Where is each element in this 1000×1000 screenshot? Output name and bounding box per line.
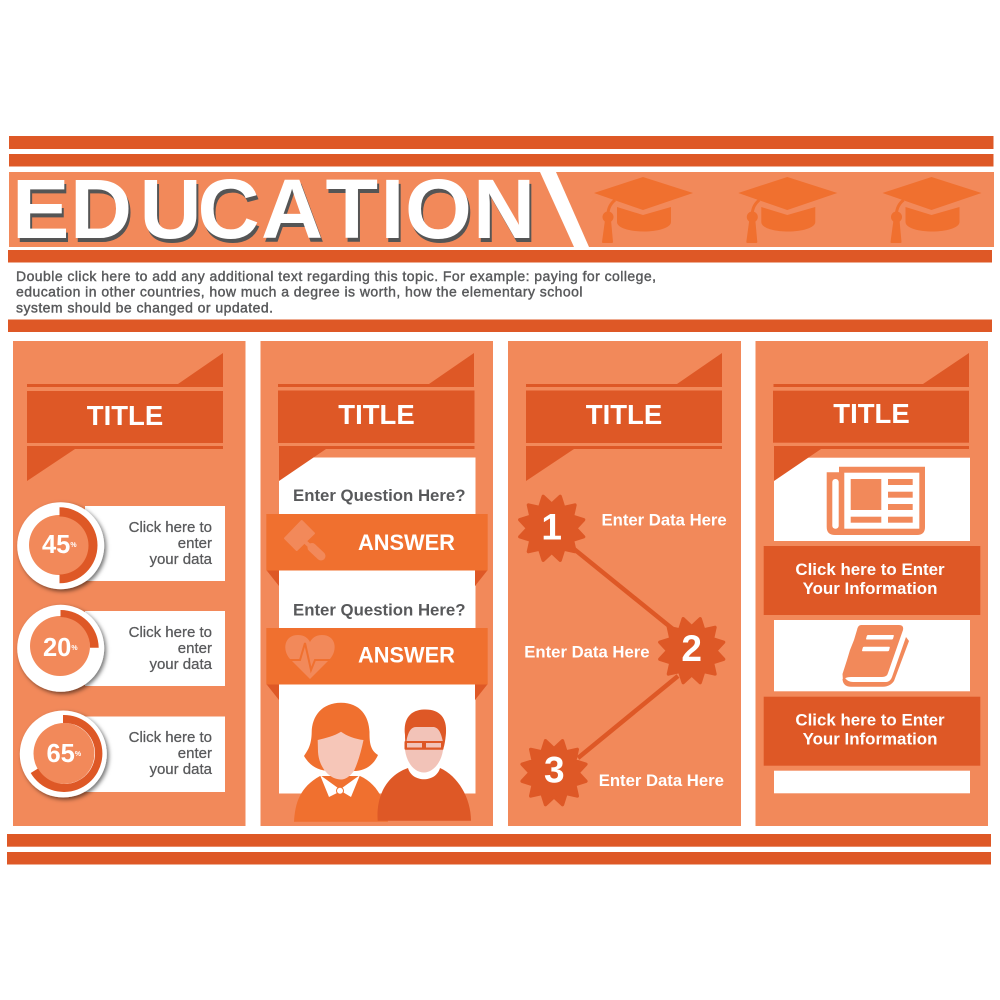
info block 2: Click here to Enter bbox=[795, 711, 945, 730]
title shadow: EDUCATION bbox=[14, 167, 537, 261]
step 3 label: Enter Data Here bbox=[599, 771, 724, 790]
icon: heart with pulse bbox=[285, 635, 335, 679]
connector line 2 to 3 bbox=[578, 676, 678, 758]
stripe under banner bbox=[8, 250, 992, 262]
stat row 20%: % bbox=[71, 645, 78, 652]
intro text bbox=[16, 268, 656, 315]
info block 1: Click here to Enter bbox=[795, 560, 945, 579]
step 2 badge: 2 bbox=[681, 628, 702, 669]
stat row 20%: 20 bbox=[43, 634, 71, 662]
answer ribbon 1: ANSWER bbox=[358, 530, 455, 555]
step 2 badge bbox=[660, 619, 724, 683]
white card 1 bbox=[774, 458, 970, 541]
stat row 65%: Click here to bbox=[129, 729, 212, 746]
icon: graduation cap 3 bbox=[882, 177, 982, 243]
info block 1: Your Information bbox=[803, 579, 937, 598]
stat row 45%: Click here to bbox=[129, 519, 212, 536]
man figure bbox=[377, 709, 471, 821]
intro text: system should be changed or updated. bbox=[16, 299, 273, 315]
stat row 20%: enter bbox=[178, 640, 212, 657]
ribbon heading 3 bbox=[526, 353, 722, 481]
stripe above panels bbox=[8, 320, 992, 332]
icon: graduation cap 2 bbox=[738, 177, 837, 243]
white question card bbox=[279, 458, 476, 794]
ribbon heading 1 bbox=[27, 353, 223, 481]
answer ribbon 1 bbox=[266, 514, 488, 586]
ribbon heading 4 bbox=[773, 353, 969, 481]
bottom stripes bbox=[7, 834, 991, 864]
icon: graduation cap 1 bbox=[594, 177, 693, 243]
woman figure bbox=[294, 703, 388, 822]
step 1 label: Enter Data Here bbox=[602, 511, 727, 530]
stat row 45%: % bbox=[70, 542, 77, 549]
icon: book bbox=[842, 625, 909, 687]
panel 2: questions and answers bbox=[260, 341, 493, 826]
top stripes bbox=[9, 136, 994, 166]
step 3 badge: 3 bbox=[544, 750, 565, 791]
connector line 1 to 2 bbox=[574, 549, 674, 630]
title: EDUCATION bbox=[12, 163, 535, 257]
step 3 badge bbox=[522, 741, 586, 805]
ribbon heading 1: TITLE bbox=[87, 400, 163, 431]
stat row 65% bbox=[20, 710, 225, 798]
stat row 65%: your data bbox=[149, 761, 213, 778]
panel 4: information cards bbox=[756, 341, 988, 826]
panel 1: percent stats bbox=[13, 341, 246, 826]
info block 1 bbox=[764, 546, 980, 615]
info block 2 bbox=[764, 697, 980, 766]
question 2: Enter Question Here? bbox=[293, 601, 466, 620]
stat row 65%: % bbox=[75, 751, 82, 758]
ribbon heading 3: TITLE bbox=[586, 399, 662, 430]
info block 2: Your Information bbox=[803, 730, 937, 749]
stat row 20%: your data bbox=[149, 656, 213, 673]
step 1 badge bbox=[520, 496, 584, 560]
white card 3 bbox=[774, 771, 970, 793]
answer ribbon 2 bbox=[266, 628, 488, 700]
answer ribbon 2: ANSWER bbox=[358, 643, 455, 668]
stat row 45%: 45 bbox=[42, 531, 70, 559]
stat row 20% bbox=[17, 605, 225, 692]
stat row 45%: enter bbox=[178, 535, 212, 552]
stat row 65%: enter bbox=[178, 745, 212, 762]
icon: gavel bbox=[285, 521, 321, 556]
banner slash bbox=[540, 172, 589, 247]
stat row 20%: Click here to bbox=[129, 624, 212, 641]
ribbon heading 2 bbox=[278, 353, 474, 481]
step 2 label: Enter Data Here bbox=[524, 642, 650, 661]
stat row 45% bbox=[17, 502, 225, 589]
ribbon heading 2: TITLE bbox=[338, 399, 415, 430]
stat row 65%: 65 bbox=[46, 740, 75, 768]
panel 3: numbered steps bbox=[508, 341, 741, 826]
question 1: Enter Question Here? bbox=[293, 486, 466, 505]
header banner bbox=[9, 163, 994, 261]
ribbon heading 4: TITLE bbox=[833, 398, 910, 429]
intro text: Double click here to add any additional text regarding this topic. For example: paying for college, bbox=[16, 268, 656, 284]
white card 2 bbox=[774, 620, 970, 691]
step 1 badge: 1 bbox=[541, 506, 562, 548]
intro text: education in other countries, how much a degree is worth, how the elementary school bbox=[16, 284, 582, 300]
icon: newspaper bbox=[827, 467, 925, 535]
stat row 45%: your data bbox=[149, 551, 213, 568]
